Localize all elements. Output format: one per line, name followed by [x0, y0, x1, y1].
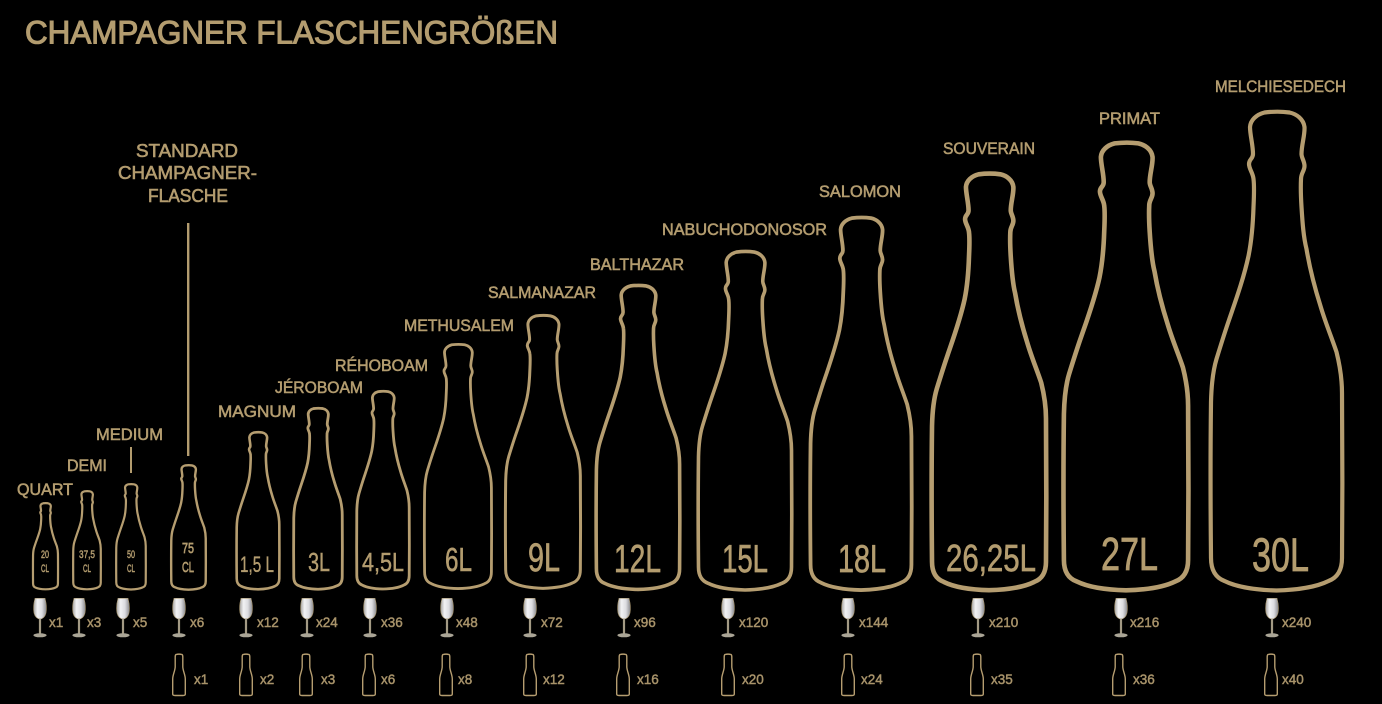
glass icon	[116, 598, 130, 637]
bottle icon	[1265, 654, 1277, 696]
title: CHAMPAGNER FLASCHENGRÖßEN	[25, 14, 558, 50]
glass icon	[300, 598, 314, 637]
bottle name: CHAMPAGNER-	[118, 163, 257, 183]
volume: 12L	[614, 538, 661, 581]
glass icon	[971, 598, 985, 637]
bottle outline	[505, 315, 581, 588]
bottle name: QUART	[17, 481, 73, 499]
bottle name: STANDARD	[136, 141, 238, 161]
bottle count: x6	[381, 672, 395, 687]
volume: 30L	[1252, 528, 1309, 581]
volume: 15L	[722, 538, 768, 581]
bottle outline	[1211, 112, 1342, 590]
bottle icon	[1113, 654, 1125, 696]
volume: CL	[182, 559, 194, 576]
bottle icon	[363, 654, 375, 696]
glass count: x48	[456, 615, 478, 630]
volume: 27L	[1101, 528, 1158, 580]
bottle outline	[810, 218, 912, 590]
bottle name: MELCHIESEDECH	[1215, 78, 1346, 96]
bottle count: x16	[637, 672, 659, 687]
glass icon	[841, 598, 855, 637]
glass icon	[72, 598, 86, 637]
column: Rehoboam	[335, 356, 428, 696]
column: Balthazar	[590, 256, 684, 696]
bottle count: x40	[1282, 672, 1304, 687]
volume: 26,25L	[946, 538, 1036, 580]
column: Quart	[17, 481, 73, 637]
volume: 9L	[528, 536, 560, 580]
bottle outline	[116, 484, 146, 589]
bottle name: METHUSALEM	[404, 317, 514, 335]
bottle count: x35	[991, 672, 1013, 687]
volume: 6L	[445, 542, 472, 579]
bottle outline	[698, 252, 792, 590]
bottle name: SALOMON	[819, 183, 901, 201]
column: Primat	[1064, 110, 1188, 696]
glass icon	[33, 598, 47, 637]
glass icon	[721, 598, 735, 637]
glass icon	[617, 598, 631, 637]
bottle name: MAGNUM	[218, 403, 296, 421]
bottle name: MEDIUM	[96, 426, 163, 444]
bottle count: x8	[458, 672, 472, 687]
glass count: x120	[739, 615, 768, 630]
bottle outline	[424, 344, 492, 589]
volume: 37,5	[79, 549, 95, 561]
volume: 18L	[838, 538, 886, 581]
glass count: x12	[257, 615, 279, 630]
bottle outline	[294, 408, 342, 589]
bottle count: x20	[742, 672, 764, 687]
glass count: x96	[634, 615, 656, 630]
bottle outline	[237, 432, 279, 589]
glass count: x210	[989, 615, 1018, 630]
bottle outline	[1064, 143, 1188, 590]
glass count: x5	[133, 615, 147, 630]
glass count: x72	[541, 615, 563, 630]
bottle icon	[440, 654, 452, 696]
bottle icon	[722, 654, 734, 696]
glass icon	[1265, 598, 1279, 637]
column: Magnum	[218, 403, 296, 696]
bottle outline	[73, 491, 101, 589]
column: Medium	[96, 426, 163, 637]
column: Melchisedech	[1211, 78, 1346, 696]
glass count: x6	[190, 615, 204, 630]
column: Jeroboam	[275, 378, 363, 696]
glass count: x240	[1282, 615, 1311, 630]
glass icon	[440, 598, 454, 637]
glass count: x36	[381, 615, 403, 630]
column: Methusalem	[404, 317, 514, 696]
bottle name: NABUCHODONOSOR	[662, 221, 827, 239]
volume: 20	[41, 549, 49, 561]
column: Standard	[118, 141, 257, 696]
bottle count: x36	[1133, 672, 1155, 687]
bottle count: x1	[194, 672, 208, 687]
bottle outline	[171, 465, 206, 590]
glass icon	[523, 598, 537, 637]
bottle icon	[524, 654, 536, 696]
bottle name: SOUVERAIN	[943, 140, 1035, 158]
bottle name: SALMANAZAR	[488, 284, 596, 302]
volume: 75	[182, 540, 194, 557]
glass icon	[239, 598, 253, 637]
volume: CL	[41, 563, 49, 575]
volume: CL	[127, 563, 135, 575]
pointer line	[187, 223, 189, 456]
bottle count: x24	[861, 672, 883, 687]
volume: 3L	[308, 547, 330, 577]
glass count: x1	[49, 615, 63, 630]
bottle icon	[842, 654, 854, 696]
volume: CL	[83, 563, 91, 575]
glass count: x216	[1130, 615, 1159, 630]
glass icon	[172, 598, 186, 637]
glass count: x144	[859, 615, 889, 630]
glass icon	[363, 598, 377, 637]
bottle name: BALTHAZAR	[590, 256, 684, 274]
pointer line	[130, 447, 132, 473]
bottle outline	[932, 174, 1046, 590]
column: Souverain	[932, 140, 1046, 696]
volume: 4,5L	[362, 547, 404, 577]
column: Salmanazar	[488, 284, 596, 696]
column: Nabuchodonosor	[662, 221, 827, 696]
bottle outline	[33, 503, 58, 589]
bottle count: x2	[260, 672, 274, 687]
bottle icon	[240, 654, 252, 696]
bottle icon	[617, 654, 629, 696]
volume: 50	[127, 549, 135, 561]
bottle name: FLASCHE	[148, 186, 228, 206]
column: Demi	[67, 457, 107, 637]
glass icon	[1114, 598, 1128, 637]
volume: 1,5 L	[240, 552, 274, 577]
bottle outline	[596, 285, 680, 589]
bottle name: DEMI	[67, 457, 107, 475]
bottle outline	[357, 391, 409, 589]
glass count: x3	[87, 615, 101, 630]
bottle icon	[971, 654, 983, 696]
bottle count: x3	[321, 672, 335, 687]
bottle name: RÉHOBOAM	[335, 356, 428, 375]
bottle icon	[173, 654, 185, 696]
bottle name: JÉROBOAM	[275, 378, 363, 397]
glass count: x24	[316, 615, 338, 630]
column: Salomon	[810, 183, 912, 696]
bottle name: PRIMAT	[1099, 110, 1160, 128]
bottle count: x12	[543, 672, 565, 687]
bottle icon	[300, 654, 312, 696]
